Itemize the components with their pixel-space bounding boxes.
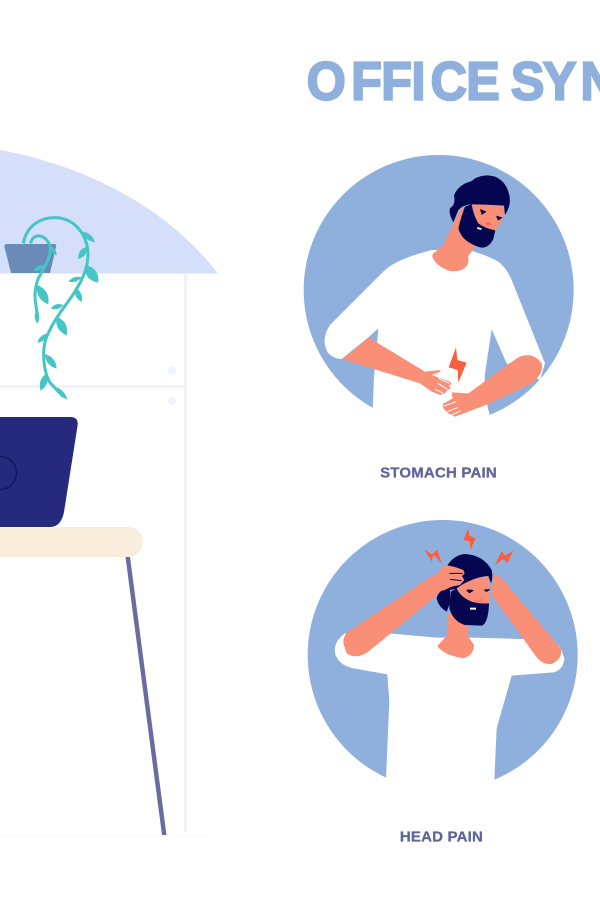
hand on head [433,565,465,591]
lamp dome [0,150,218,274]
label: head pain: HEAD PAIN [400,828,483,846]
panel: head pain [308,520,578,846]
left arm [343,575,443,656]
head [432,175,510,271]
laptop [0,417,78,527]
shelving unit [0,273,187,832]
label: stomach pain: STOMACH PAIN [380,464,497,482]
left forearm and hand [342,337,452,395]
icon: stomach lightning bolt [449,347,467,383]
hanging plant [23,218,98,399]
head [433,554,492,658]
desk leg [126,557,166,835]
right forearm and hand [443,355,542,417]
right arm [492,573,561,664]
panel: stomach pain [304,155,574,482]
icon: left lightning bolt [424,549,442,563]
plant pot [4,244,56,273]
desk top [0,527,143,557]
icon: top lightning bolt [463,528,476,550]
illustration: man holding stomach [304,155,574,428]
icon: right lightning bolt [495,551,513,565]
illustration: man holding head [308,520,578,793]
